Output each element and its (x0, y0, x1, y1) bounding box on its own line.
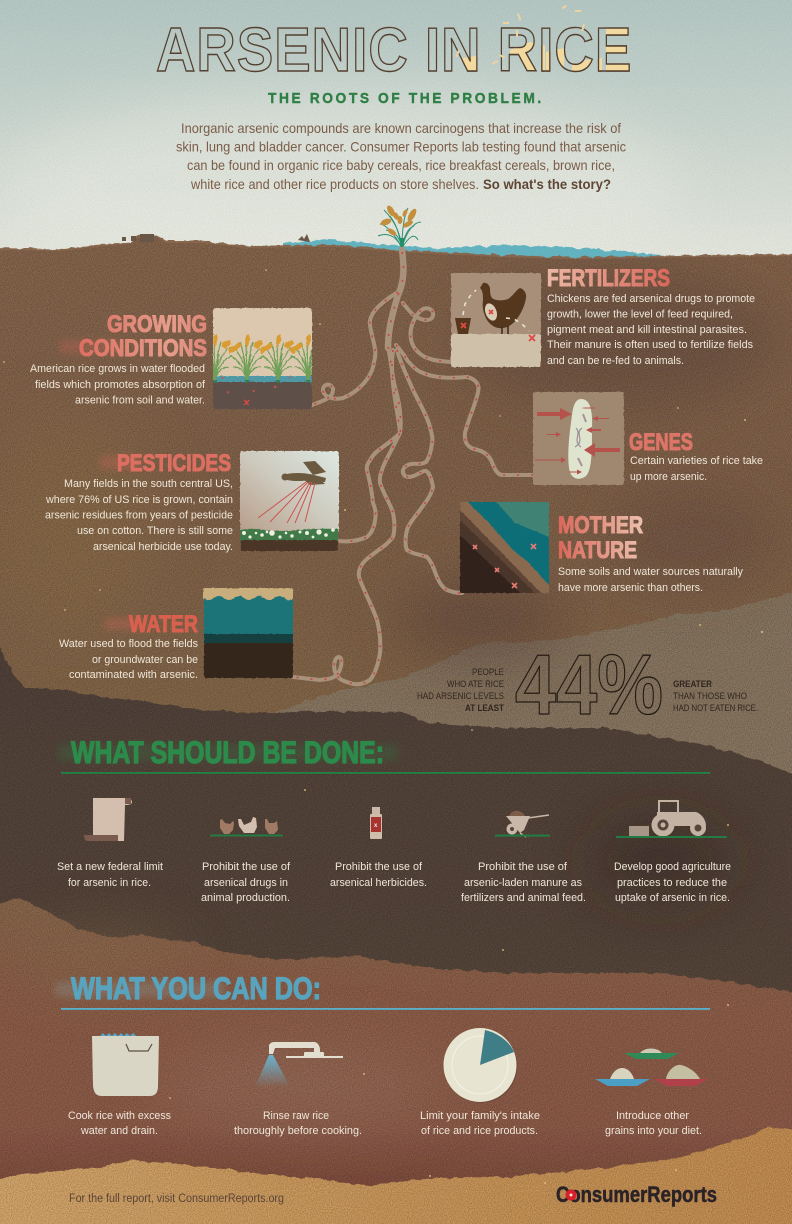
subtitle: THE ROOTS OF THE PROBLEM. (268, 91, 541, 107)
right caption (673, 679, 758, 714)
title: ARSENIC IN RICE (156, 16, 631, 85)
caption (420, 1110, 540, 1137)
caption (68, 1110, 171, 1137)
item: arsenical drugs (201, 817, 291, 904)
panel: mother nature (460, 502, 743, 594)
callout: 44 percent (417, 638, 758, 733)
icon: plate pie chart (444, 1028, 518, 1103)
illustration: water layers (203, 588, 293, 678)
caption: Develop good agriculture (614, 861, 731, 873)
caption: Prohibit the use of (335, 861, 423, 873)
caption: arsenical drugs in (204, 877, 288, 889)
item: manure (461, 811, 586, 904)
caption: Cook rice with excess (68, 1110, 171, 1122)
panel: water (59, 588, 293, 681)
intro text: can be found in organic rice baby cereals, rice breakfast cereals, brown rice, (187, 158, 615, 173)
panel: growing conditions (30, 308, 326, 409)
body text: American rice grows in water flooded (30, 363, 205, 375)
caption: Introduce other (616, 1110, 689, 1122)
caption (605, 1110, 702, 1137)
caption: Prohibit the use of (478, 861, 568, 873)
heading: GROWING (107, 311, 207, 338)
heading (558, 512, 643, 564)
body text: arsenical herbicide use today. (93, 541, 233, 553)
intro text: Inorganic arsenic compounds are known carcinogens that increase the risk of (181, 121, 621, 136)
item: rinse rice (234, 1042, 362, 1137)
left caption (417, 667, 504, 714)
illustration: crop duster background (240, 451, 339, 551)
body text: Many fields in the south central US, (64, 478, 233, 490)
right caption: THAN THOSE WHO (673, 691, 747, 702)
item: other grains (595, 1048, 708, 1137)
item: agriculture (614, 801, 731, 904)
heading: MOTHER (558, 512, 643, 539)
caption (234, 1110, 362, 1137)
background: sky (0, 0, 792, 260)
caption (330, 861, 427, 889)
caption: uptake of arsenic in rice. (615, 892, 730, 904)
root system (293, 250, 533, 684)
logo: Consumer Reports: ConsumerReports (556, 1182, 717, 1207)
icon: chickens (210, 817, 283, 836)
left caption: AT LEAST (465, 703, 504, 714)
panel: fertilizers (451, 265, 755, 367)
icon: bottle: x (374, 823, 378, 829)
item: herbicides (330, 807, 427, 889)
sky light haze (0, 90, 680, 290)
illustration: panel background (451, 273, 541, 367)
body text: contaminated with arsenic. (69, 669, 198, 681)
body text: and can be re-fed to animals. (547, 355, 684, 367)
heading (60, 311, 207, 362)
footer text: For the full report, visit ConsumerReports.org (69, 1193, 284, 1205)
illustration: biplane and spray (242, 461, 335, 539)
intro text: white rice and other rice products on store shelves. (190, 177, 479, 192)
dark layer (0, 645, 792, 1010)
heading: PESTICIDES (117, 450, 231, 477)
body text: up more arsenic. (630, 471, 707, 483)
icon: pot (92, 1033, 159, 1096)
rice plant (378, 204, 421, 249)
heading: FERTILIZERS (547, 265, 670, 292)
section: what should be done (57, 734, 731, 904)
icon: faucet (255, 1042, 343, 1087)
left caption: WHO ATE RICE (447, 679, 504, 690)
heading: GENES (629, 429, 693, 456)
caption (461, 861, 586, 904)
body text: fields which promotes absorption of (35, 379, 206, 391)
caption (201, 861, 291, 904)
item: limit intake (420, 1028, 540, 1137)
speckles (3, 269, 763, 1184)
body text (547, 293, 755, 367)
icon: scroll (84, 798, 132, 841)
body text (30, 363, 206, 406)
caption: fertilizers and animal feed. (461, 892, 586, 904)
caption: Rinse raw rice (263, 1110, 329, 1122)
body text (59, 638, 198, 681)
panel: pesticides (45, 450, 339, 553)
caption: Set a new federal limit (57, 861, 164, 873)
sky grain (0, 0, 792, 260)
item: cook with excess water (68, 1033, 171, 1137)
body text: arsenic residues from years of pesticide (45, 510, 233, 522)
body text: Water used to flood the fields (59, 638, 198, 650)
intro text: skin, lung and bladder cancer. Consumer Reports lab testing found that arsenic (176, 140, 626, 154)
big number: 44% (515, 638, 663, 733)
left caption: PEOPLE (472, 667, 504, 678)
topsoil (0, 235, 792, 720)
caption: arsenical herbicides. (330, 877, 427, 889)
body text (630, 455, 763, 483)
illustration: chicken and manure (455, 283, 535, 341)
heading: WHAT YOU CAN DO: (71, 970, 321, 1006)
section: what you can do (55, 970, 710, 1137)
panel: genes (533, 392, 763, 485)
body text: have more arsenic than others. (558, 582, 703, 594)
icon: grain bowls (595, 1048, 708, 1086)
surface water (283, 240, 660, 262)
illustration: panel background (533, 392, 624, 485)
caption: Limit your family's intake (420, 1110, 540, 1122)
body text: pigment meat and kill intestinal parasites. (547, 324, 747, 336)
icon: wheelbarrow (495, 811, 550, 837)
falling rice grains (456, 5, 585, 65)
body text: use on cotton. There is still some (77, 525, 233, 537)
caption: practices to reduce the (617, 877, 727, 889)
caption (614, 861, 731, 904)
illustration: flooded rice field (212, 308, 312, 410)
heading (105, 611, 198, 638)
illustration: rice grain with arrows (535, 399, 620, 479)
intro text: So what's the story? (483, 177, 611, 192)
caption: of rice and rice products. (421, 1125, 538, 1137)
right caption: HAD NOT EATEN RICE. (673, 703, 758, 714)
caption: arsenic-laden manure as (464, 877, 582, 889)
heading: CONDITIONS (79, 335, 207, 362)
horizon silhouettes (122, 234, 310, 242)
body text (558, 566, 743, 594)
body text: growth, lower the level of feed required, (547, 308, 733, 320)
caption: animal production. (201, 892, 290, 904)
body text: Their manure is often used to fertilize fields (547, 339, 753, 351)
illustration: soil strata (460, 502, 549, 593)
heading: NATURE (558, 537, 637, 564)
body text: Some soils and water sources naturally (558, 566, 743, 578)
icon: tractor (616, 801, 727, 838)
right caption: GREATER (673, 679, 712, 690)
intro text (176, 121, 626, 192)
reddish layer (0, 898, 792, 1200)
body text (45, 478, 233, 553)
body text: Chickens are fed arsenical drugs to promote (547, 293, 755, 305)
body text: or groundwater can be (92, 654, 198, 666)
orange layer (0, 1127, 792, 1224)
caption: for arsenic in rice. (68, 877, 151, 889)
heading: WHAT SHOULD BE DONE: (71, 734, 384, 770)
heading: WATER (129, 611, 198, 638)
dusty layer (273, 590, 792, 800)
body text: Certain varieties of rice take (630, 455, 763, 467)
caption: water and drain. (80, 1125, 158, 1137)
caption: grains into your diet. (605, 1125, 702, 1137)
body text: where 76% of US rice is grown, contain (45, 494, 233, 506)
title fill: rice-coloured wash: ARSENIC IN RICE (156, 16, 631, 85)
caption (57, 861, 164, 889)
body text: arsenic from soil and water. (75, 394, 205, 406)
item: federal limit (57, 798, 164, 889)
caption: Prohibit the use of (202, 861, 291, 873)
left caption: HAD ARSENIC LEVELS (417, 691, 504, 702)
soil tone patches (75, 265, 776, 1115)
caption: thoroughly before cooking. (234, 1125, 362, 1137)
